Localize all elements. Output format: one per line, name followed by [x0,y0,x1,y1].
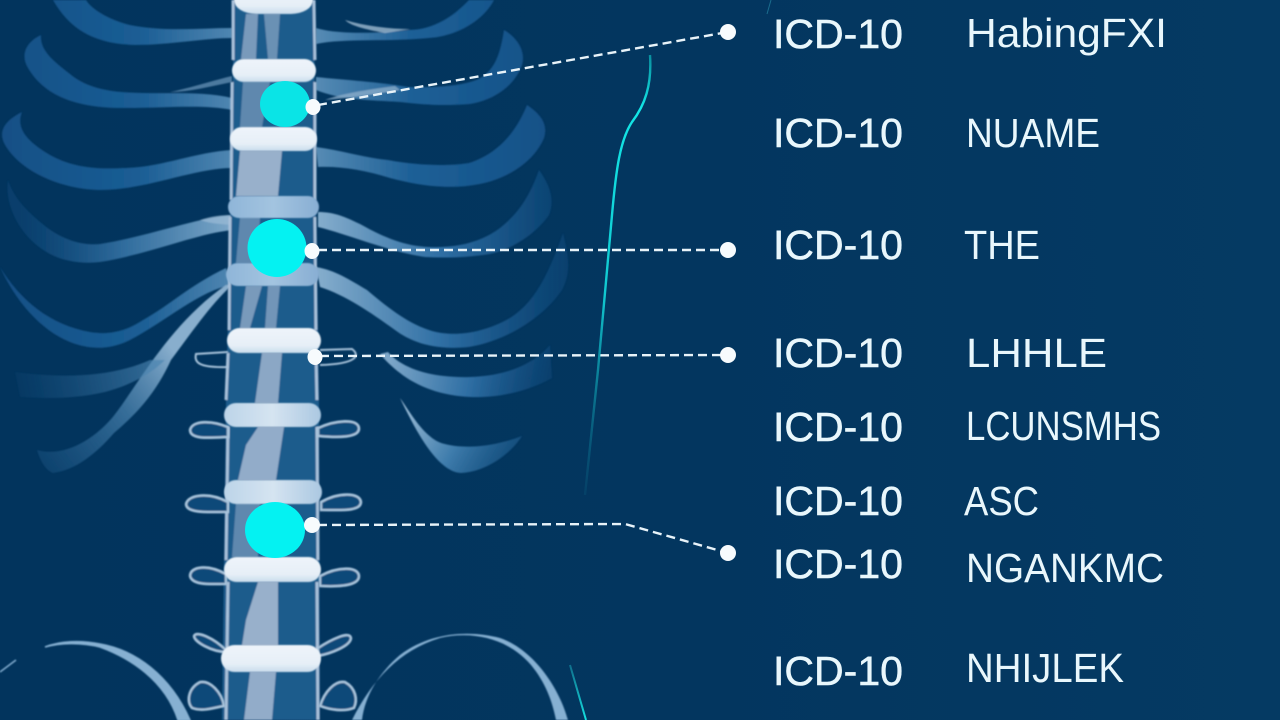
process pair 2 [190,421,359,438]
disc 10 [221,645,321,672]
name row 2: NUAME [966,110,1100,156]
process pair 1 [196,349,356,367]
disc 5 [226,263,319,286]
accent tick top [767,0,771,14]
left iliac arc [0,642,190,720]
highlighted lesion: lower [245,502,305,558]
accent curve bottom [570,665,586,720]
anchor 3 [308,349,322,365]
teal accent curves [570,0,771,720]
name row 7: NGANKMC [966,545,1164,591]
name row 8: NHIJLEK [966,645,1124,691]
disc 8 [224,480,322,504]
intervertebral discs [221,0,322,672]
vertebral body [222,0,320,720]
disc 3 [230,127,317,151]
disc 7 [224,403,321,427]
anchor dots on spine [304,99,322,533]
code row 4: ICD-10 [773,330,903,376]
anchor 4 [304,517,320,533]
disc 4 [228,196,319,218]
process pair 5 [194,634,351,656]
code row 5: ICD-10 [773,404,903,450]
dashed leader lines [318,32,728,553]
end dots [720,24,736,561]
code row 8: ICD-10 [773,648,903,694]
disc 2 [232,59,316,82]
transverse processes [186,349,361,710]
disc 9 [224,557,321,582]
name row 5: LCUNSMHS [966,403,1161,449]
spine column [222,0,320,720]
leader 3 [320,355,728,356]
right ribs [316,0,568,473]
anchor 2 [304,243,320,259]
process pair 6 [189,682,356,710]
name column [964,10,1167,691]
process pair 3 [186,494,361,512]
highlighted lesion: middle [248,219,306,277]
code row 2: ICD-10 [773,110,903,156]
anchor 1 [306,99,320,115]
central light strips [232,14,284,720]
code row 1: ICD-10 [773,11,903,57]
highlighted lesion: upper [260,81,310,127]
end dot 2 [720,242,736,258]
spine edges [226,0,233,720]
leader 2 [318,249,728,251]
end dot 4 [720,545,736,561]
name row 3: THE [964,222,1040,268]
process pair 4 [190,567,359,586]
disc 6 [227,328,321,353]
disc 1 [234,0,313,14]
name row 1: HabingFXI [966,10,1167,56]
accent curve main [585,55,650,495]
rib cage [0,0,568,473]
right iliac arc [352,634,568,720]
code column [773,11,903,694]
end dot 3 [720,347,736,363]
pelvis [0,634,568,720]
leader 1 [318,32,728,105]
code row 3: ICD-10 [773,222,903,268]
end dot 1 [720,24,736,40]
name row 6: ASC [964,478,1039,524]
code row 6: ICD-10 [773,478,903,524]
code row 7: ICD-10 [773,541,903,587]
name row 4: LHHLE [966,330,1107,376]
leader 4 [318,524,728,553]
left ribs [0,0,232,473]
